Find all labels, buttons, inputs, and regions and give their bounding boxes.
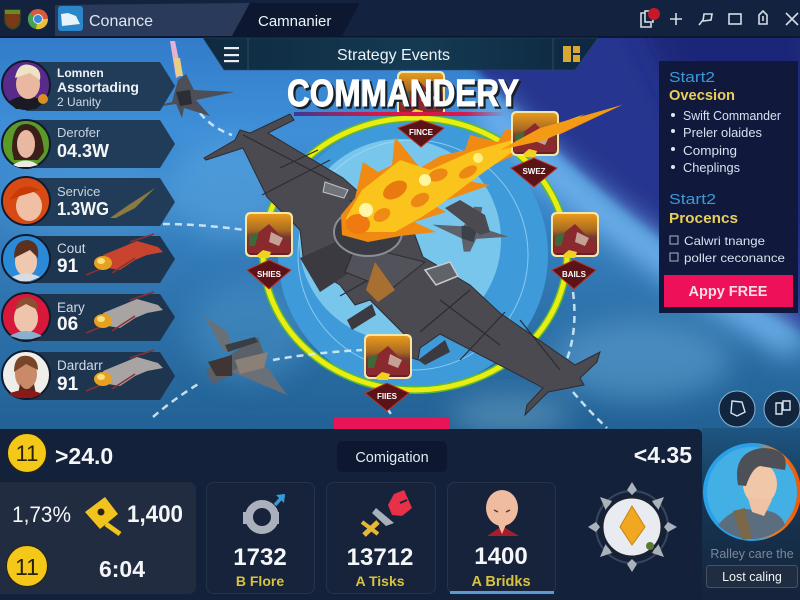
event card: upper right (511, 111, 559, 187)
row 2: Derofer: Derofer (57, 125, 101, 140)
panel: info sidebar: Cheplings (683, 161, 740, 175)
panel: info sidebar: Ovecsion (669, 87, 735, 104)
dashed route lines (153, 113, 607, 428)
mini ship grey (86, 292, 163, 333)
icon: layout (563, 46, 580, 62)
jet: small right of fireball (428, 194, 515, 263)
carrier aircraft (204, 114, 600, 415)
row 4: Cout: 91 (57, 256, 79, 277)
panel: bottom dashboard (0, 429, 702, 600)
tab: Camnanier: Camnanier (258, 13, 331, 30)
card: A Tisks: 13712 (347, 544, 413, 571)
icon: diamond key (85, 497, 120, 534)
icon: menu (224, 47, 239, 62)
icon: compass (588, 482, 677, 572)
background: space and earth (0, 0, 800, 435)
icon: gear with arrow (243, 494, 285, 530)
row 6: Dardarr (2, 350, 175, 400)
icons: window controls (641, 8, 798, 27)
row 5: Eary (2, 292, 175, 341)
card: resources: 6:04 (99, 556, 145, 582)
yellow level badge: 11 (16, 441, 38, 466)
card: A Bridks: 1400 (474, 543, 528, 570)
yellow level badge (8, 434, 46, 472)
tab: Conance (55, 3, 250, 36)
target disc with yellow ring (263, 118, 567, 390)
card: A Tisks: A Tisks (355, 573, 405, 589)
card: A Tisks (326, 482, 436, 594)
icon buttons (719, 391, 800, 427)
tab: Camnanier (232, 3, 360, 36)
row 2: Derofer: 04.3W (57, 141, 109, 161)
row 2: Derofer (2, 120, 175, 168)
row 5: Eary: 06 (57, 314, 78, 335)
caption: Ralley care the: Ralley care the (710, 547, 794, 561)
jet: bottom left (205, 317, 287, 395)
fireball tail over card (500, 105, 622, 150)
panel: info sidebar: Start2 (669, 191, 716, 208)
panel: info sidebar: poller ceconance (684, 251, 785, 265)
row 6: Dardarr: Dardarr (57, 358, 103, 373)
jet: top left with exhaust trail (148, 41, 234, 118)
row 1: Lomnen (2, 61, 175, 111)
title: COMMANDERY (287, 73, 519, 115)
header bar: Strategy Events: Strategy Events (337, 47, 450, 64)
mini ship red (86, 234, 163, 275)
fireball (341, 105, 622, 242)
icon: bald avatar (486, 490, 519, 536)
row 5: Eary: Eary (57, 300, 85, 315)
card: B Flore: 1732 (233, 544, 287, 571)
panel: info sidebar: Preler olaides (683, 126, 762, 140)
card: B Flore: B Flore (236, 573, 284, 589)
panel: info sidebar: Calwri tnange (684, 234, 765, 248)
event marker: top (398, 120, 444, 147)
card: resources: 1,73% (12, 502, 71, 527)
icon: shield (5, 10, 20, 29)
card: resources: 1,400 (127, 501, 183, 528)
row 3: Service (2, 177, 175, 226)
card: B Flore (206, 482, 314, 594)
card: resources: 11 (15, 554, 39, 580)
card: resources (0, 482, 196, 594)
event card: bottom: FIIES (377, 392, 398, 401)
row 6: Dardarr: 91 (57, 374, 79, 395)
row 1: Lomnen: Lomnen (57, 66, 104, 80)
button: Comigation: Comigation (355, 450, 429, 466)
button: Appy FREE (664, 275, 793, 307)
row 3: Service: Service (57, 184, 100, 199)
tab: Conance: Conance (89, 13, 153, 30)
portrait area background (702, 428, 800, 600)
pink action bar (334, 417, 450, 431)
header bar: Strategy Events (203, 38, 598, 70)
button: Appy FREE: Appy FREE (689, 284, 768, 300)
row 3: Service: 1.3WG (57, 199, 109, 219)
card: A Bridks: A Bridks (471, 574, 531, 590)
panel: info sidebar: Comping (683, 144, 737, 158)
event card: top (397, 71, 445, 117)
icon: browser (28, 9, 48, 29)
mini ship gold (110, 188, 155, 218)
event card: left: SHIES (257, 270, 282, 279)
portrait: commander (705, 445, 799, 540)
panel: info sidebar: Procencs (669, 210, 738, 227)
row 4: Cout (2, 234, 175, 283)
event card: bottom (364, 334, 412, 411)
title: COMMANDERY (289, 75, 521, 117)
card: A Bridks (448, 482, 556, 594)
event marker: top: FINCE (409, 128, 434, 137)
event card: right (551, 212, 599, 289)
event card: left (245, 212, 293, 289)
top bar (0, 0, 800, 38)
row 4: Cout: Cout (57, 241, 86, 256)
row 1: Lomnen: 2 Uanity (57, 95, 101, 109)
button: Comigation (337, 441, 447, 472)
event card: upper right: SWEZ (522, 167, 546, 176)
icon: sword and E (362, 490, 412, 535)
stat: >24.0: >24.0 (55, 443, 113, 469)
panel: info sidebar: Swift Commander (683, 109, 781, 123)
button: Lost caling: Lost caling (722, 570, 782, 584)
button: Lost caling (706, 566, 798, 588)
stat: <4.35: <4.35 (634, 442, 692, 468)
panel: info sidebar: Start2 (669, 69, 715, 86)
row 1: Lomnen: Assortading (57, 80, 139, 95)
mini ship grey (86, 350, 163, 391)
event card: right: BAILS (562, 270, 587, 279)
panel: info sidebar (659, 61, 798, 313)
